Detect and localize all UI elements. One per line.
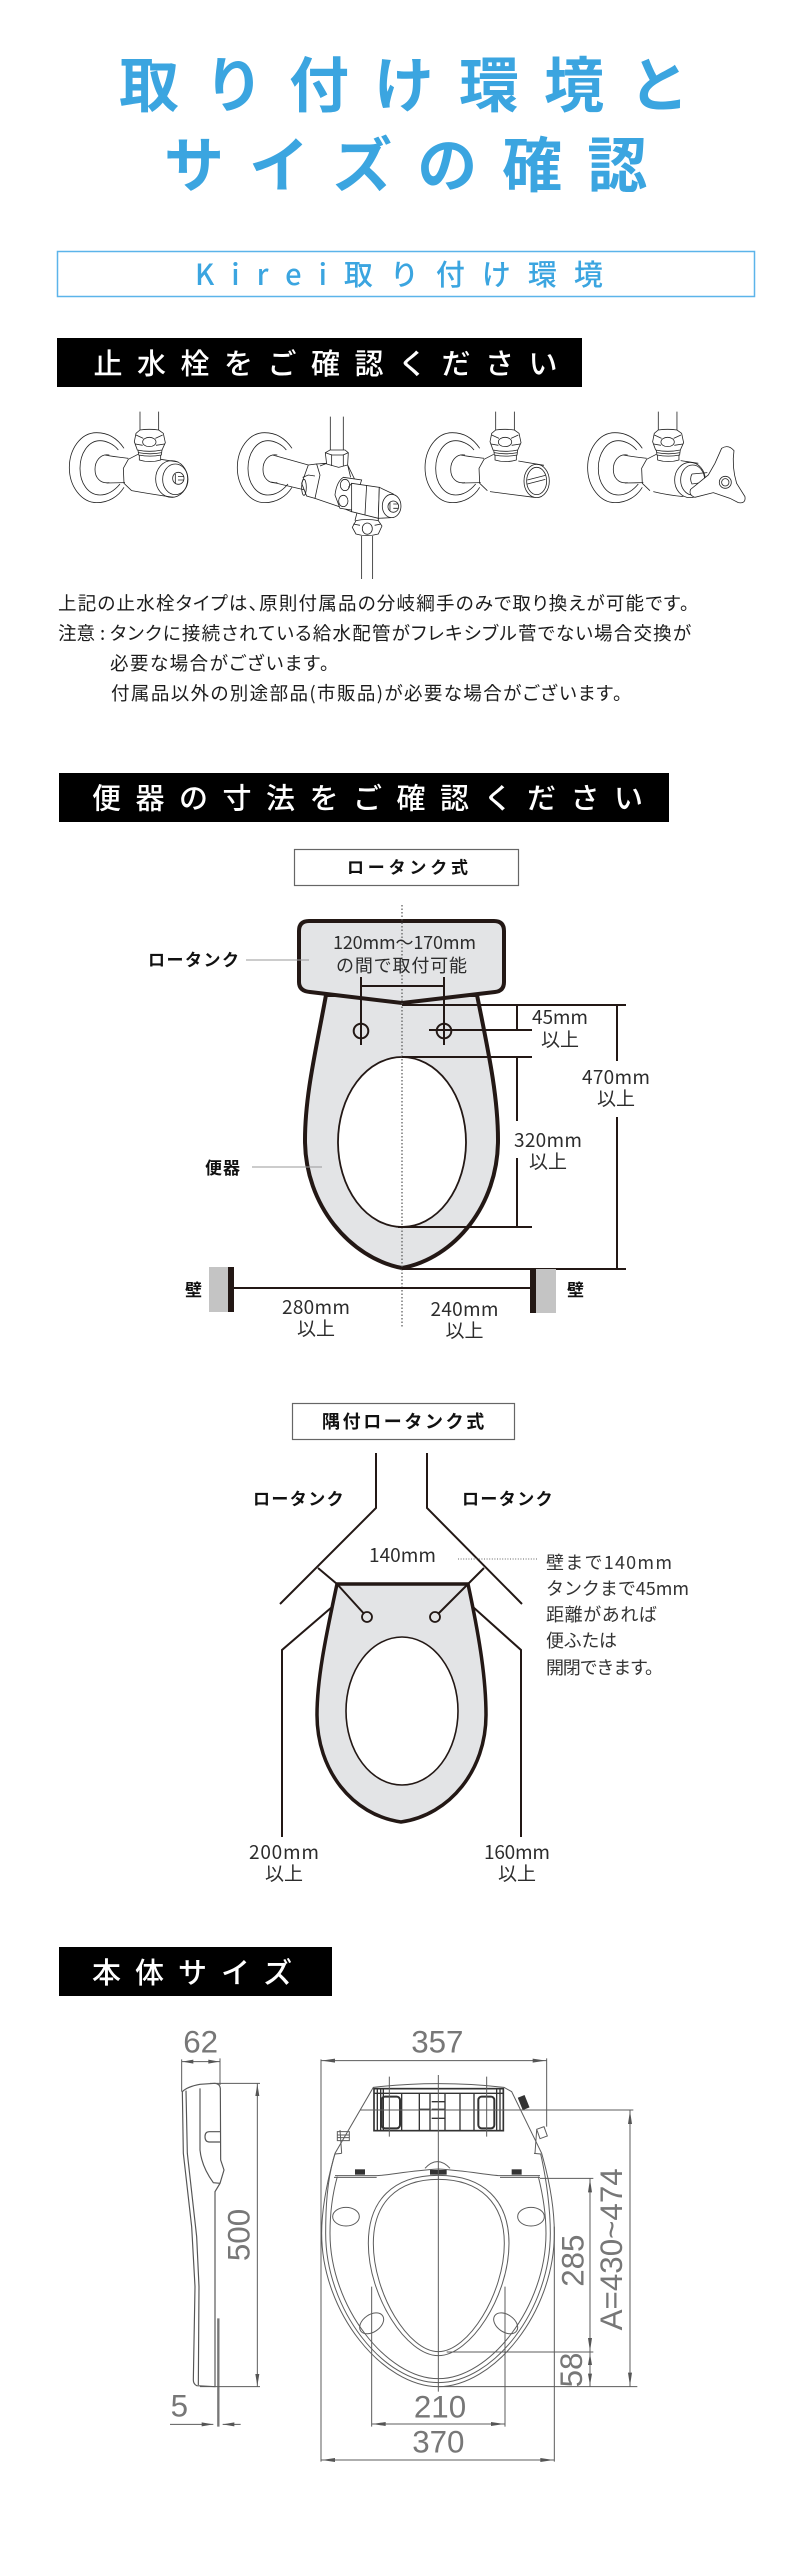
heading: 本体サイズ [59,1947,332,1996]
right wall [530,1269,584,1313]
dimension: 280mm: 280mm [282,1293,350,1320]
dimension: 160mm: 以上 [498,1859,536,1886]
icon: valve 1 [69,412,188,503]
tank mounting text [333,929,476,978]
dimension: 200mm: 200mm [249,1838,319,1865]
dimension: 200mm: 以上 [265,1859,303,1886]
left wall [185,1267,234,1312]
dimension: 240mm [430,1295,498,1343]
dimension: 357 [321,2025,547,2462]
dimension: 470mm: 470mm [582,1063,650,1090]
hinge blocks [355,2095,530,2175]
dimension: 357: 357 [411,2025,463,2060]
side profile [182,2083,224,2387]
text block: valve notes: 注意 [58,620,95,646]
icon: valve 2 [237,417,401,579]
dimension: 45mm: 45mm [532,1003,588,1030]
dimension: 320mm: 320mm [514,1126,582,1153]
dimension: 320mm [514,1126,582,1174]
toilet bowl [317,1584,486,1822]
labels: ロータンク: ロータンク [253,1485,345,1510]
dimension: 500 [200,2083,260,2387]
note: clearance: 便ふたは [546,1627,617,1653]
dimension: 470mm: 以上 [597,1084,635,1111]
dimension: 58: 58 [554,2353,589,2387]
label box: ロータンク式: ロータンク式 [347,854,472,878]
icon: valve 3 [425,412,549,503]
note: clearance: タンクまで45mm [546,1575,689,1601]
dimension: 470mm [582,1063,650,1111]
tank outline lines [280,1453,522,1837]
technical drawing: side view [170,2025,260,2427]
note: clearance [546,1549,689,1680]
subtitle box: Kirei取り付け環境: Kirei取り付け環境 [195,252,620,294]
heading: 止水栓をご確認ください: 止水栓をご確認ください [94,341,572,383]
dimension: 210: 210 [414,2389,466,2424]
diagram: corner tank toilet [249,1453,689,1886]
callout: 便器: 便器 [205,1154,241,1179]
labels: ロータンク [253,1485,554,1510]
text block: valve notes: 上記の止水栓タイプは、原則付属品の分岐綱手のみで取り換えが可能です。 [58,590,689,616]
dimension: 370 [321,2227,554,2462]
icon: valve 4 [588,412,745,503]
diagram: low tank toilet [148,905,650,1343]
dimension: 45mm [532,1003,588,1052]
dimension: 160mm [484,1838,550,1886]
dimension: 62: 62 [183,2025,218,2060]
text block: valve notes: 付属品以外の別途部品(市販品)が必要な場合がございます。 [111,680,622,706]
toilet bowl [305,995,498,1268]
heading: 便器の寸法をご確認ください: 便器の寸法をご確認ください [92,776,658,818]
dimension: 240mm: 以上 [445,1316,484,1343]
dimension: 45mm: 以上 [541,1025,579,1052]
tank [299,921,504,1003]
dimension: 140mm: 140mm [369,1541,436,1568]
dimension lines [398,1005,626,1269]
title: サイズの確認 [164,118,672,205]
labels: ロータンク: ロータンク [462,1485,554,1510]
text block: valve notes [58,590,691,706]
title: 取り付け環境と [119,38,714,125]
label box: ロータンク式 [294,850,518,886]
heading: 本体サイズ: 本体サイズ [92,1950,306,1992]
callout: 便器 [205,1154,322,1179]
dimension: 285 [447,2178,593,2352]
dimension: 210 [372,2287,505,2427]
text block: valve notes: タンクに接続されている給水配管がフレキシブル菅でない場合交換が [110,620,691,646]
dimension: 5 [170,2389,241,2426]
label box: 隅付ロータンク式 [292,1404,514,1440]
mounting holes and bracket [354,977,532,1045]
tank mounting text: 120mm〜170mm [333,929,476,955]
text block: valve notes: 必要な場合がございます。 [110,650,329,676]
label box: 隅付ロータンク式: 隅付ロータンク式 [322,1408,487,1434]
center lines [389,2075,487,2392]
title [119,38,714,205]
dimension: 200mm [249,1838,319,1886]
note: clearance: 開閉できます。 [546,1654,663,1680]
technical drawing: top view [321,2025,637,2462]
note: clearance: 壁まで140mm [546,1549,672,1575]
valve illustrations [69,412,745,579]
mount plate [374,2089,503,2131]
callout: ロータンク: ロータンク [148,946,240,971]
dimension: 160mm: 160mm [484,1838,550,1865]
subtitle box: Kirei取り付け環境 [58,252,754,296]
dimension: 320mm: 以上 [529,1147,567,1174]
right wall: 壁 [567,1276,584,1301]
dimension: 62 [182,2025,220,2092]
note: clearance: 距離があれば [546,1601,657,1627]
dimension: 280mm [282,1293,350,1341]
dimension: A=430~474 [360,2110,637,2387]
dimension: 280mm: 以上 [297,1314,335,1341]
seat opening [368,2175,509,2356]
bumpers [333,2207,544,2338]
dimension: 240mm: 240mm [430,1295,498,1322]
text block: valve notes: : [100,620,105,646]
dimension: 285: 285 [555,2235,590,2287]
left wall: 壁 [185,1276,202,1301]
dimension: 500: 500 [221,2209,256,2261]
seat outline [322,2084,554,2387]
dimension: 5: 5 [171,2389,188,2424]
dimension: 370: 370 [412,2425,464,2460]
dimension: A=430~474: A=430~474 [594,2168,629,2330]
tank mounting text: の間で取付可能 [336,952,467,978]
center line [401,905,403,1327]
